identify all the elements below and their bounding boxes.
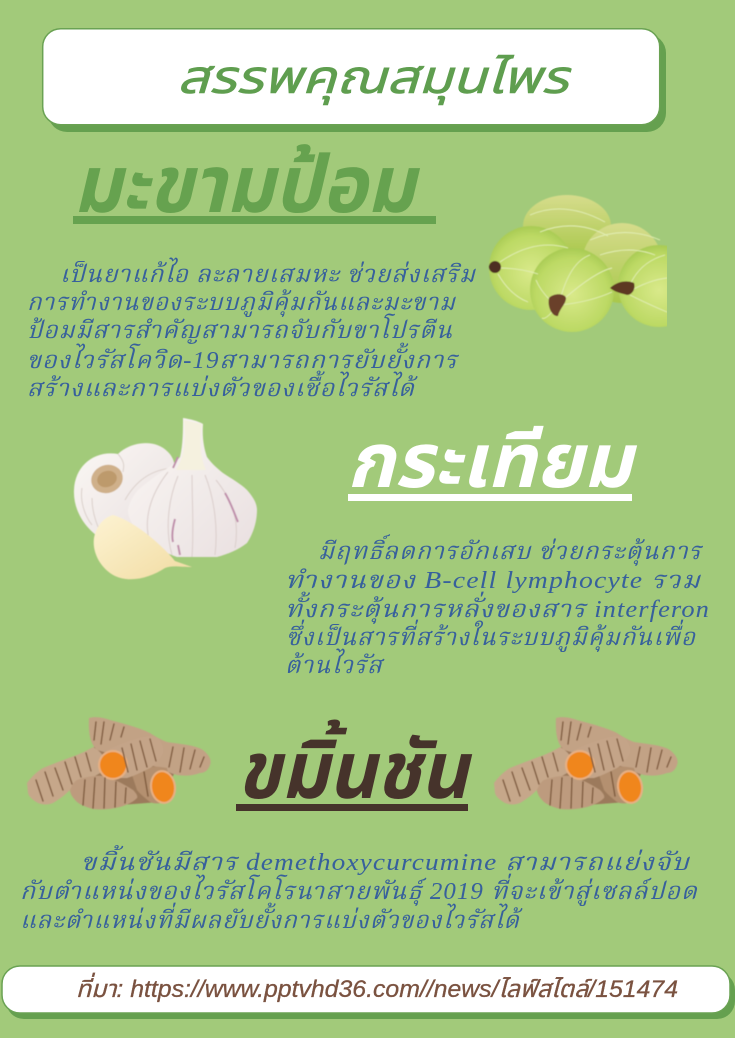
icon: garlic <box>74 418 257 579</box>
text block: turmeric description: กับตำแหน่งของไวรัสโคโรนาสายพันธุ์ 2019 ที่จะเข้าสู่เซลล์ปอด <box>20 873 698 907</box>
text block: turmeric description: ขมิ้นชันมีสาร demethoxycurcumine สามารถแย่งจับ <box>81 844 691 876</box>
text block: gooseberry description: เป็นยาแก้ไอ ละลายเสมหะ ช่วยส่งเสริม <box>60 257 476 288</box>
icon: turmeric left <box>27 717 211 809</box>
icon: turmeric right <box>494 717 678 809</box>
text block: garlic description: ซึ่งเป็นสารที่สร้างในระบบภูมิคุ้มกันเพื่อ <box>286 619 696 653</box>
text block: garlic description <box>285 533 710 679</box>
source text: ที่มา: https://www.pptvhd36.com//news/ไลฟ์สไตล์/151474 <box>76 972 678 1003</box>
text block: garlic description: ต้านไวรัส <box>285 648 385 679</box>
source banner <box>2 966 735 1019</box>
title banner <box>43 29 666 132</box>
heading: Indian gooseberry: มะขามป้อม <box>73 140 421 229</box>
heading: garlic: กระเทียม <box>347 419 638 504</box>
text block: garlic description: มีฤทธิ์ลดการอักเสบ ช่วยกระตุ้นการ <box>318 533 703 567</box>
text block: gooseberry description: ของไวรัสโควิด-19สามารถการยับยั้งการ <box>27 342 459 374</box>
heading: turmeric: ขมิ้นชัน <box>237 720 473 815</box>
text block: garlic description: ทั้งกระตุ้นการหลั่งของสาร interferon <box>285 591 710 625</box>
text block: gooseberry description <box>27 257 476 402</box>
text block: gooseberry description: การทำงานของระบบภูมิคุ้มกันและมะขาม <box>27 289 456 318</box>
icon: Indian gooseberries <box>488 194 667 332</box>
text block: gooseberry description: ป้อมมีสารสำคัญสามารถจับกับขาโปรตีน <box>27 313 453 344</box>
text block: gooseberry description: สร้างและการแบ่งตัวของเชื้อไวรัสได้ <box>27 370 418 402</box>
text block: turmeric description: และตำแหน่งที่มีผลยับยั้งการแบ่งตัวของไวรัสได้ <box>20 902 523 934</box>
text block: garlic description: ทำงานของ B-cell lymphocyte รวม <box>285 568 701 594</box>
text block: turmeric description <box>20 844 698 934</box>
title text: สรรพคุณสมุนไพร <box>177 51 572 105</box>
